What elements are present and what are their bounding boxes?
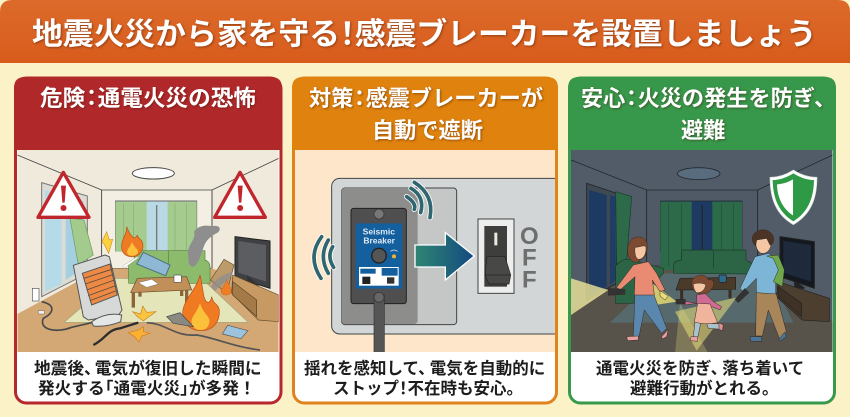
cables bbox=[42, 302, 92, 330]
caption: relief: 避難行動がとれる。 bbox=[630, 375, 778, 399]
caption: countermeasure: ストップ！不在時も安心。 bbox=[333, 375, 523, 399]
off label: F bbox=[522, 266, 537, 293]
panel heading: danger: 危険：通電火災の恐怖 bbox=[40, 80, 256, 113]
off label: O bbox=[520, 223, 539, 250]
smoke bbox=[188, 226, 220, 267]
panel heading: countermeasure: 対策：感震ブレーカーが bbox=[309, 81, 543, 113]
caption: relief: 通電火災を防ぎ、落ち着いて bbox=[596, 355, 804, 379]
breaker device: Seismic bbox=[363, 228, 396, 237]
illustration: living room on fire bbox=[17, 150, 279, 352]
caption: danger: 発火する「通電火災」が多発！ bbox=[38, 375, 256, 399]
panel: relief bbox=[568, 77, 836, 403]
panel heading: countermeasure: 自動で遮断 bbox=[372, 113, 483, 145]
panel: countermeasure bbox=[292, 77, 585, 403]
illustration: family evacuating with flashlights bbox=[571, 150, 833, 353]
off label bbox=[521, 227, 538, 288]
caption: relief bbox=[596, 355, 804, 399]
icon: warning triangle left bbox=[38, 172, 89, 217]
panel heading: relief: 避難 bbox=[681, 113, 725, 145]
child bbox=[676, 275, 723, 341]
title banner bbox=[0, 0, 850, 63]
father bbox=[735, 230, 787, 341]
illustration: seismic breaker and switch bbox=[295, 150, 555, 352]
panel heading: relief: 安心：火災の発生を防ぎ、 bbox=[581, 81, 836, 113]
arrow bbox=[415, 233, 474, 280]
left waves bbox=[314, 237, 334, 278]
title banner: 地震火災から家を守る！感震ブレーカーを設置しましょう bbox=[32, 8, 817, 54]
off label: F bbox=[522, 245, 537, 272]
panel: danger bbox=[14, 77, 282, 403]
caption: countermeasure bbox=[304, 355, 545, 399]
flashlight beams bbox=[571, 278, 608, 315]
icon: shield bbox=[770, 170, 817, 225]
cable bbox=[374, 295, 384, 353]
breaker device bbox=[351, 208, 406, 304]
breaker device: Breaker bbox=[363, 237, 395, 246]
caption: danger: 地震後、電気が復旧した瞬間に bbox=[34, 355, 262, 379]
flames bbox=[221, 279, 231, 295]
panel heading: relief bbox=[581, 81, 836, 145]
panel heading: countermeasure bbox=[309, 81, 543, 145]
switch bbox=[478, 219, 514, 293]
heater bbox=[73, 255, 122, 320]
right waves bbox=[407, 182, 431, 218]
icon: warning triangle right bbox=[215, 172, 265, 217]
caption: countermeasure: 揺れを感知して、電気を自動的に bbox=[304, 355, 545, 379]
mother bbox=[608, 237, 668, 341]
caption: danger bbox=[34, 355, 262, 399]
wall plate bbox=[331, 178, 555, 334]
